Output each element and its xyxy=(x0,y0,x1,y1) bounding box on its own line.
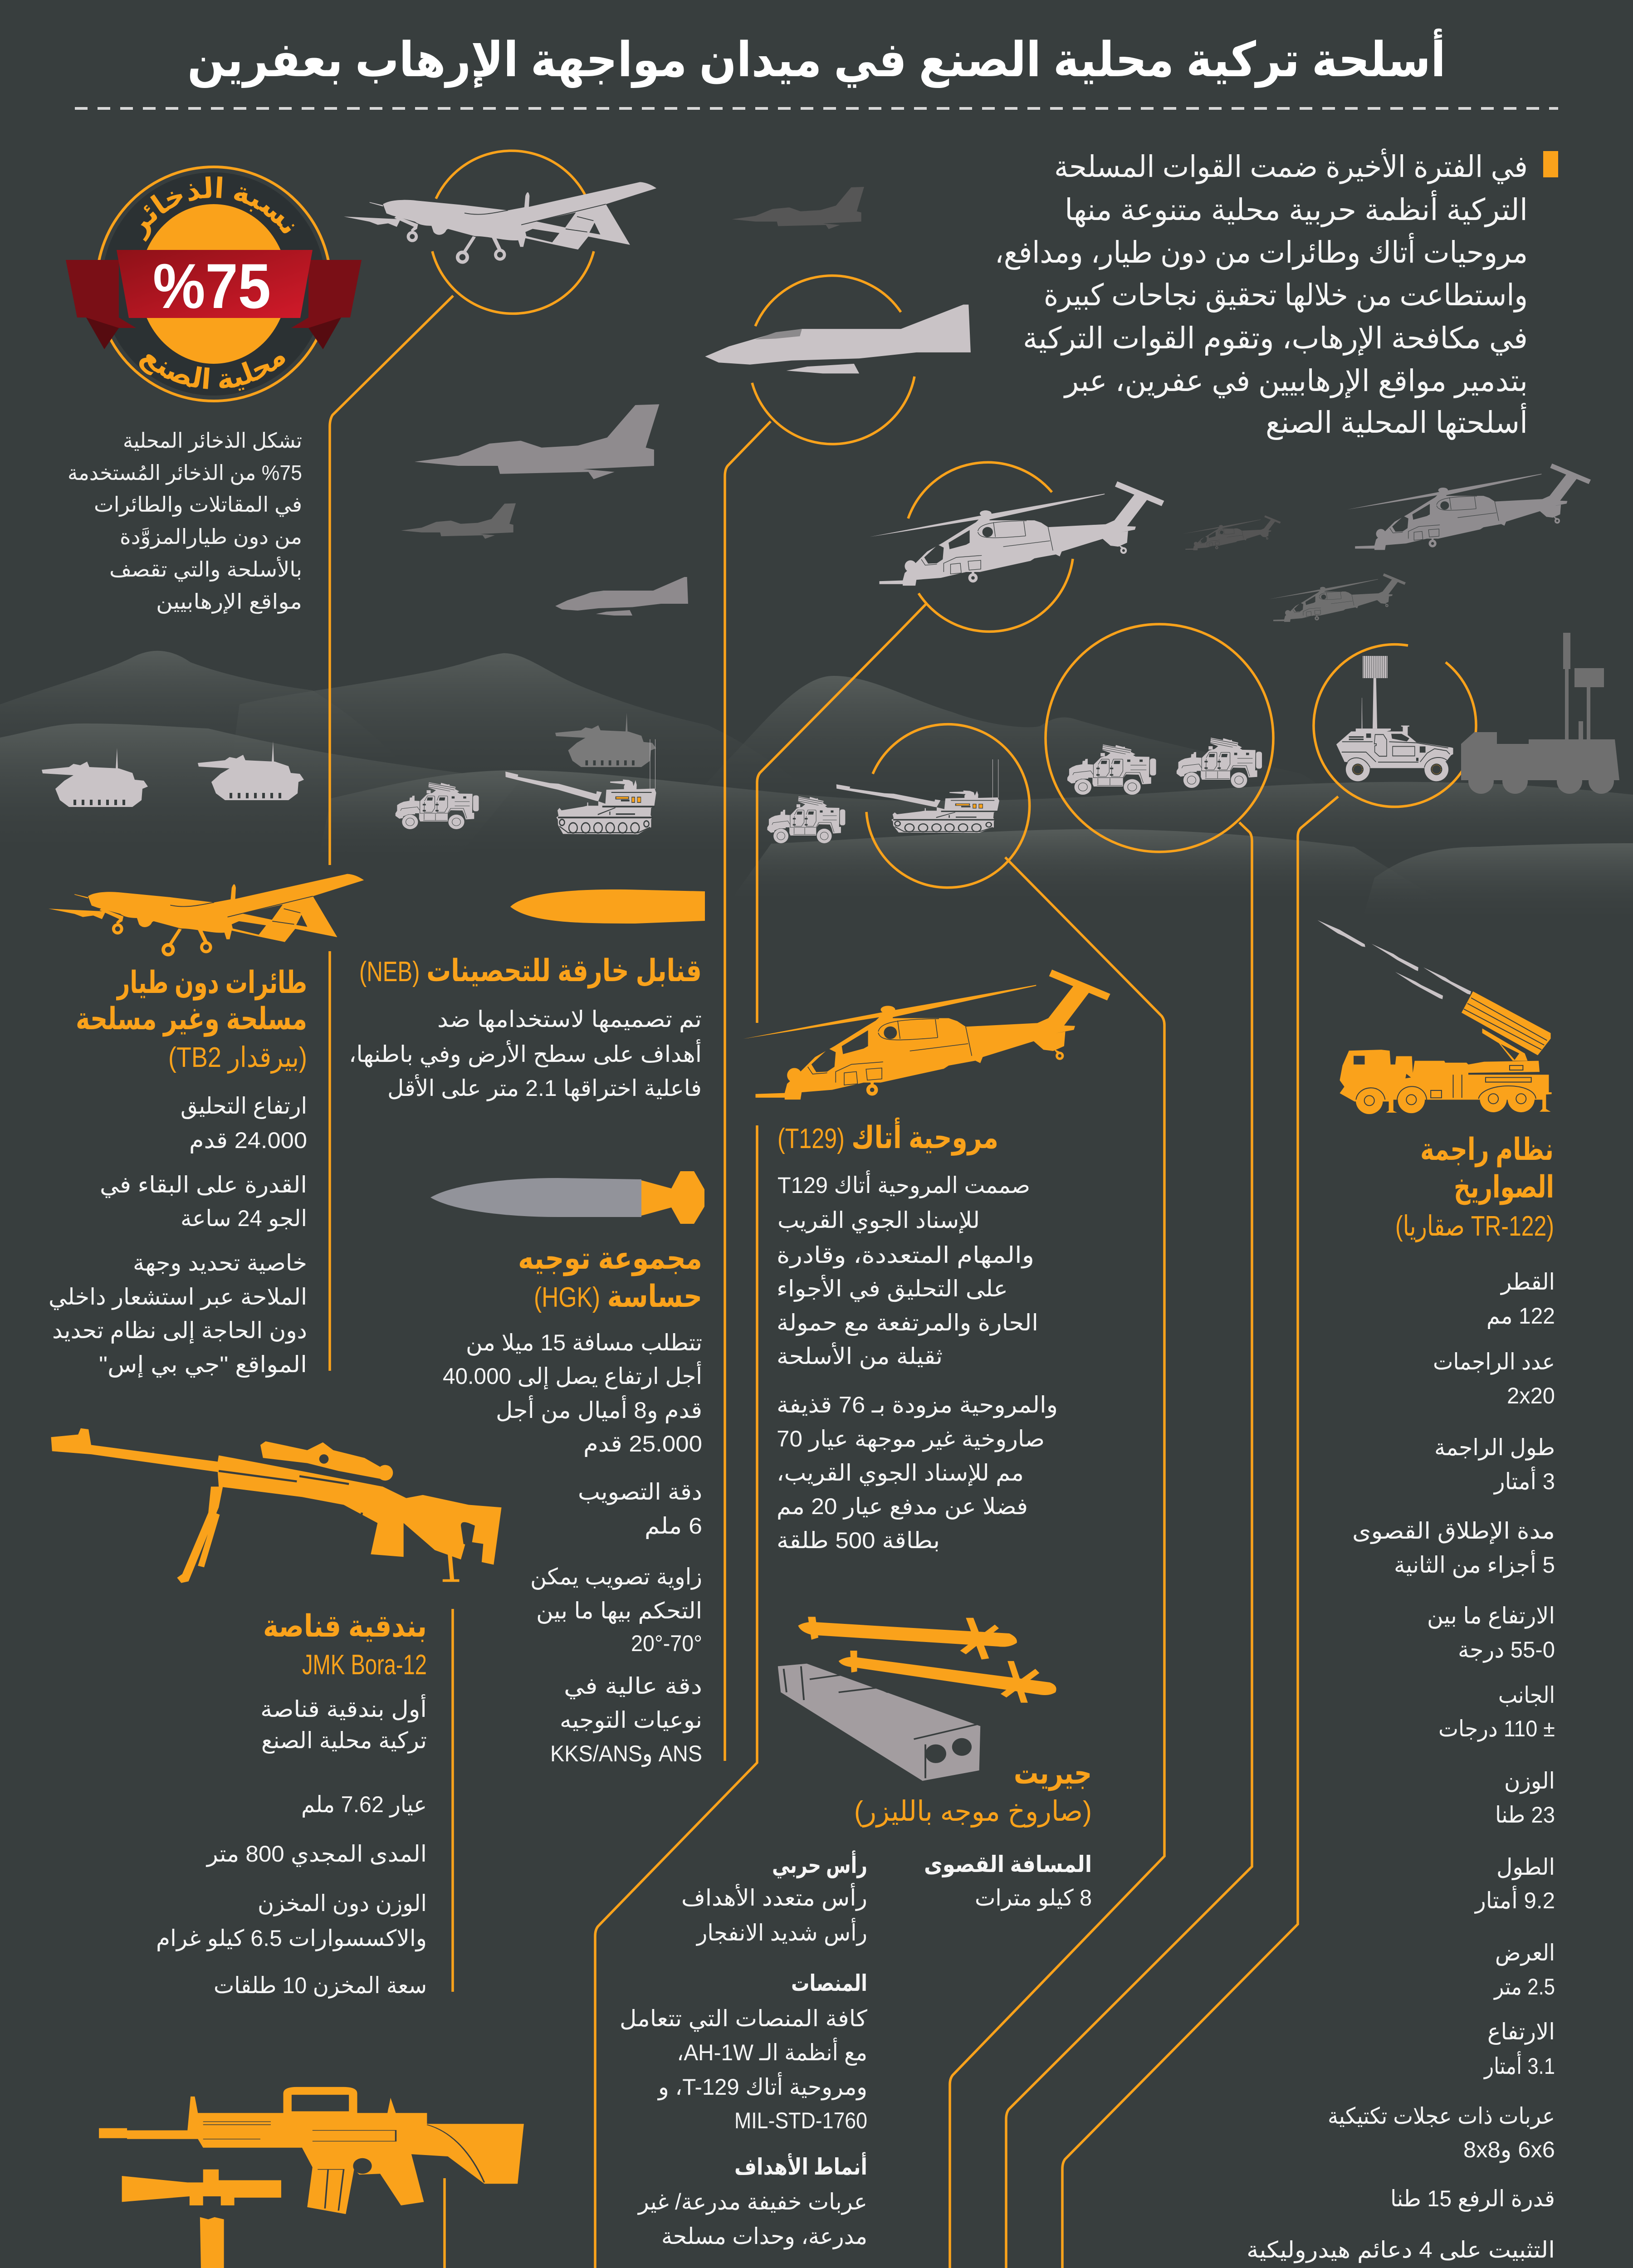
connector lines and circles xyxy=(330,151,1476,2268)
text: NEB description: فاعلية اختراقها 2.1 متر على الأقل xyxy=(387,1074,702,1102)
text: rocket launcher specifications: 5 أجزاء من الثانية xyxy=(1394,1550,1555,1578)
text: Cirit warhead, platforms and targets xyxy=(620,1850,867,2250)
text: T129 description: ثقيلة من الأسلحة xyxy=(777,1342,943,1369)
heading: rocket launcher xyxy=(1395,1132,1554,1242)
heading: HGK: حساسة (HGK) xyxy=(534,1279,702,1314)
text: rocket launcher specifications: 3 أمتار xyxy=(1493,1466,1555,1495)
text: drone specifications: القدرة على البقاء في xyxy=(100,1172,307,1198)
icon: tank two xyxy=(198,741,304,800)
text: ammunition share: في المقاتلات والطائرات xyxy=(94,493,302,517)
text: drone specifications: خاصية تحديد وجهة xyxy=(133,1250,307,1276)
text: rocket launcher specifications: العرض xyxy=(1495,1940,1555,1966)
text: NEB description xyxy=(349,1007,702,1102)
icon: armored vehicle three xyxy=(1067,744,1156,795)
text: NEB description: أهداف على سطح الأرض وفي باطنها، xyxy=(349,1039,702,1068)
icon: orange drone xyxy=(49,874,364,956)
intro paragraph xyxy=(995,148,1528,440)
heading: armed drones xyxy=(76,965,307,1074)
icon: Cirit missiles and launcher xyxy=(778,1617,1056,1781)
heading: rocket launcher: الصواريخ xyxy=(1454,1170,1554,1205)
title: أسلحة تركية محلية الصنع في ميدان مواجهة الإرهاب بعفرين xyxy=(187,29,1446,88)
icon: armored vehicle one xyxy=(396,782,479,829)
icon: grey helicopter xyxy=(870,481,1164,586)
text: Cirit max range: 8 كيلو مترات xyxy=(975,1885,1092,1911)
text: T129 description: بطاقة 500 طلقة xyxy=(777,1528,940,1553)
text: HGK specifications: 25.000 قدم xyxy=(583,1431,702,1457)
icon: grey howitzer two xyxy=(836,759,999,833)
icon: sniper rifle xyxy=(51,1428,502,1583)
icon: mid grey helicopter xyxy=(1347,464,1591,550)
text: Cirit warhead, platforms and targets: عربات خفيفة مدرعة/ غير xyxy=(637,2189,867,2215)
text: ammunition share: بالأسلحة والتي تقصف xyxy=(109,556,302,582)
text: rocket launcher specifications: 122 مم xyxy=(1486,1303,1555,1329)
badge: 75% ammunition xyxy=(66,167,362,401)
text: HGK specifications: نوعيات التوجيه xyxy=(560,1707,702,1733)
heading: Cirit: جيريت xyxy=(1014,1756,1092,1791)
text: ammunition share: مواقع الإرهابيين xyxy=(156,590,302,614)
text: rocket launcher specifications: 3.1 أمتار xyxy=(1483,2051,1555,2079)
heading: T129: مروحية أتاك (T129) xyxy=(777,1117,998,1156)
text: rocket launcher specifications: 55-0 درجة xyxy=(1458,1637,1555,1663)
intro paragraph: التركية أنظمة حربية محلية متنوعة منها xyxy=(1065,190,1528,227)
text: HGK specifications: 6 ملم xyxy=(645,1513,702,1539)
text: sniper rifle specifications: سعة المخزن 10 طلقات xyxy=(214,1973,427,1999)
text: rocket launcher specifications: قدرة الرفع 15 طنا xyxy=(1390,2186,1555,2212)
text: rocket launcher specifications: طول الراجمة xyxy=(1434,1435,1555,1461)
text: Cirit warhead, platforms and targets: MIL-STD-1760 xyxy=(734,2108,867,2133)
intro paragraph: أسلحتها المحلية الصنع xyxy=(1266,403,1528,440)
text: HGK specifications: 20°-70° xyxy=(631,1631,702,1656)
text: T129 description: فضلا عن مدفع عيار 20 مم xyxy=(777,1494,1028,1520)
text: sniper rifle specifications: تركية محلية الصنع xyxy=(261,1728,427,1754)
text: Cirit warhead, platforms and targets: رأس متعدد الأهداف xyxy=(681,1883,867,1911)
text: rocket launcher specifications: ± 110 درجات xyxy=(1438,1716,1555,1742)
text: rocket launcher specifications: عربات ذات عجلات تكتيكية xyxy=(1328,2103,1555,2129)
text: sniper rifle specifications: والاكسسوارات 6.5 كيلو غرام xyxy=(156,1926,427,1952)
text: rocket launcher specifications: الارتفاع ما بين xyxy=(1427,1603,1555,1629)
icon: F-16 jet xyxy=(415,404,659,479)
text: HGK specifications: ANS وKKS/ANS xyxy=(550,1741,702,1767)
heading: sniper rifle: بندقية قناصة xyxy=(263,1609,427,1643)
text: Cirit warhead, platforms and targets: ومروحية أتاك T-129، و xyxy=(657,2072,867,2101)
intro paragraph: في الفترة الأخيرة ضمت القوات المسلحة xyxy=(1054,148,1528,184)
text: sniper rifle specifications: الوزن دون المخزن xyxy=(258,1891,427,1917)
intro paragraph: بتدمير مواقع الإرهابيين في عفرين، عبر xyxy=(1063,364,1528,398)
text: rocket launcher specifications: 2x20 xyxy=(1507,1383,1555,1408)
icon: grey radar vehicle xyxy=(1336,656,1453,781)
intro paragraph: في مكافحة الإرهاب، وتقوم القوات التركية xyxy=(1023,321,1528,356)
heading: armed drones: مسلحة وغير مسلحة xyxy=(76,1002,307,1037)
text: rocket launcher specifications: 2.5 متر xyxy=(1493,1974,1555,2000)
text: rocket launcher specifications: 9.2 أمتار xyxy=(1474,1886,1555,1914)
heading: HGK xyxy=(518,1241,702,1314)
text: ammunition share: %75 من الذخائر المُستخدمة xyxy=(68,461,302,485)
text: HGK specifications: قدم و8 أميال من أجل xyxy=(496,1395,702,1424)
icon: dark small jet xyxy=(732,187,864,229)
text: rocket launcher specifications: الوزن xyxy=(1504,1768,1555,1794)
text: HGK specifications: دقة التصويب xyxy=(578,1479,702,1505)
icon: MPT-76 rifle, scope and bipod xyxy=(99,2087,524,2268)
text: T129 description: والمروحية مزودة بـ 76 قذيفة xyxy=(777,1392,1058,1418)
text: T129 description: صاروخية غير موجهة عيار 70 xyxy=(777,1426,1045,1452)
icon: orange helicopter xyxy=(743,969,1110,1100)
text: HGK specifications: أجل ارتفاع يصل إلى 40.000 xyxy=(443,1361,702,1390)
heading: armed drones: طائرات دون طيار xyxy=(116,965,307,1001)
text: sniper rifle specifications: أول بندقية قناصة xyxy=(260,1694,427,1723)
icon: armored vehicle four xyxy=(1177,738,1262,788)
heading: sniper rifle xyxy=(263,1609,427,1681)
text: T129 description xyxy=(777,1170,1058,1553)
text: T129 description: على التحليق في الأجواء xyxy=(777,1275,1008,1302)
text: T129 description: مم للإسناد الجوي القريب، xyxy=(777,1460,1024,1486)
icon: phantom jet xyxy=(705,305,971,373)
intro marker xyxy=(1543,151,1558,177)
text: drone specifications: الملاحة عبر استشعار داخلي xyxy=(49,1284,307,1310)
text: drone specifications: المواقع "جي بي إس" xyxy=(99,1352,307,1378)
icon: grey howitzer one xyxy=(505,739,656,834)
text: drone specifications: دون الحاجة إلى نظام تحديد xyxy=(52,1318,307,1344)
text: drone specifications: ارتفاع التحليق xyxy=(181,1093,307,1119)
heading: NEB bombs: قنابل خارقة للتحصينات (NEB) xyxy=(359,953,702,989)
text: HGK specifications: زاوية تصويب يمكن xyxy=(530,1564,702,1590)
text: Cirit warhead, platforms and targets: كافة المنصات التي تتعامل xyxy=(620,2006,867,2032)
text: rocket launcher specifications: 6x6 و8x8 xyxy=(1463,2137,1555,2163)
intro paragraph: مروحيات أتاك وطائرات من دون طيار، ومدافع، xyxy=(995,233,1528,270)
icon: HGK guided bomb xyxy=(430,1171,704,1224)
badge: 75% ammunition: نسبة الذخائر xyxy=(121,173,306,242)
heading: rocket launcher: (TR-122 صقاريا) xyxy=(1395,1211,1554,1242)
icon: dark tank xyxy=(555,713,656,767)
text: rocket launcher specifications: التثبيت على 4 دعائم هيدروليكية xyxy=(1247,2237,1555,2263)
text: Cirit warhead, platforms and targets: مدرعة، وحدات مسلحة xyxy=(661,2224,867,2250)
text: drone specifications xyxy=(49,1093,307,1378)
text: sniper rifle specifications: المدى المجدي 800 متر xyxy=(205,1841,427,1867)
text: HGK specifications: التحكم بيها ما بين xyxy=(536,1598,702,1624)
text: ammunition share: من دون طيارالمزوَّدة xyxy=(120,525,302,549)
text: Cirit warhead, platforms and targets: رأس شديد الانفجار xyxy=(695,1918,867,1946)
text: rocket launcher specifications: 23 طنا xyxy=(1495,1802,1555,1828)
text: drone specifications: الجو 24 ساعة xyxy=(181,1206,307,1232)
icon: armored vehicle two xyxy=(767,797,845,843)
text: HGK specifications: دقة عالية في xyxy=(564,1673,702,1699)
text: rocket launcher specifications xyxy=(1247,1269,1555,2263)
intro paragraph: واستطاعت من خلالها تحقيق نجاحات كبيرة xyxy=(1044,278,1528,313)
icon: grey radar truck xyxy=(1461,633,1619,794)
heading: armed drones: (بيرقدار TB2) xyxy=(168,1042,307,1074)
text: Cirit warhead, platforms and targets: رأس حربي xyxy=(772,1850,867,1879)
icon: tank one xyxy=(42,748,148,807)
text: rocket launcher specifications: الارتفاع xyxy=(1487,2019,1555,2045)
heading: sniper rifle: JMK Bora-12 xyxy=(302,1649,427,1681)
text: Cirit warhead, platforms and targets: المنصات xyxy=(791,1970,867,1996)
text: Cirit warhead, platforms and targets: أنماط الأهداف xyxy=(734,2152,867,2180)
text: drone specifications: 24.000 قدم xyxy=(189,1128,307,1154)
mountains xyxy=(0,651,1633,925)
badge: 75% ammunition: محلية الصنع xyxy=(135,340,292,396)
icon: small phantom xyxy=(555,577,688,616)
heading: HGK: مجموعة توجيه xyxy=(518,1241,702,1276)
icon: dark helicopter xyxy=(1182,515,1281,550)
text: ammunition share xyxy=(68,429,302,614)
icon: rocket launcher truck xyxy=(1317,920,1552,1114)
text: rocket launcher specifications: الجانب xyxy=(1498,1682,1555,1708)
text: rocket launcher specifications: الطول xyxy=(1496,1854,1555,1880)
text: rocket launcher specifications: مدة الإطلاق القصوى xyxy=(1352,1518,1555,1544)
text: Cirit warhead, platforms and targets: مع أنظمة الـ AH-1W، xyxy=(677,2038,867,2066)
text: T129 description: الحارة والمرتفعة مع حمولة xyxy=(777,1310,1038,1336)
text: NEB description: تم تصميمها لاستخدامها ضد xyxy=(437,1007,702,1033)
heading: Cirit xyxy=(854,1756,1092,1828)
heading: Cirit: (صاروخ موجه بالليزر) xyxy=(854,1796,1092,1828)
icon: small jet lower left xyxy=(401,503,516,539)
badge: 75% ammunition: %75 xyxy=(153,250,271,322)
text: sniper rifle specifications: عيار 7.62 ملم xyxy=(301,1792,427,1818)
text: HGK specifications xyxy=(443,1330,702,1767)
text: T129 description: صممت المروحية أتاك T129 xyxy=(777,1170,1030,1199)
text: T129 description: والمهام المتعددة، وقادرة xyxy=(777,1242,1034,1269)
text: Cirit max range: المسافة القصوى xyxy=(924,1852,1092,1878)
text: HGK specifications: تتطلب مسافة 15 ميلا من xyxy=(466,1330,702,1356)
text: Cirit max range xyxy=(924,1852,1092,1911)
icon: grey drone xyxy=(344,182,656,264)
text: rocket launcher specifications: عدد الراجمات xyxy=(1433,1349,1555,1375)
icon: bunker buster shell xyxy=(510,890,705,924)
text: rocket launcher specifications: القطر xyxy=(1500,1269,1555,1295)
icon: distant helicopter xyxy=(1269,573,1406,622)
text: T129 description: للإسناد الجوي القريب xyxy=(777,1207,980,1233)
text: sniper rifle specifications xyxy=(156,1694,427,1999)
text: ammunition share: تشكل الذخائر المحلية xyxy=(123,429,302,453)
heading: rocket launcher: نظام راجمة xyxy=(1420,1132,1554,1168)
